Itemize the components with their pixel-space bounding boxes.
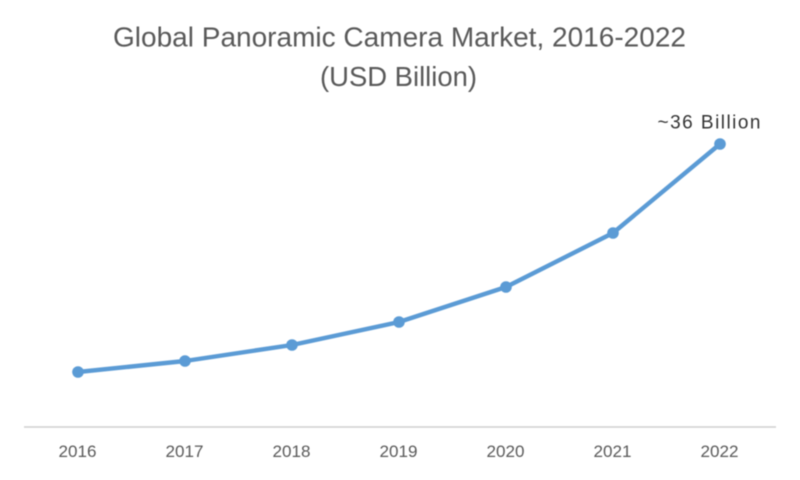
x axis labels: 2021 (594, 443, 632, 461)
x axis labels: 2016 (58, 443, 96, 461)
x axis labels: 2017 (166, 443, 204, 461)
x axis labels: 2019 (380, 443, 418, 461)
title (113, 22, 686, 92)
data label: ~36 Billion (658, 112, 760, 134)
x axis labels: 2018 (272, 443, 310, 461)
title: Global Panoramic Camera Market, 2016-2022 (113, 22, 686, 52)
x axis labels (58, 443, 738, 461)
line chart (72, 138, 726, 378)
x axis line (24, 426, 776, 428)
title: (USD Billion) (320, 61, 477, 92)
x axis labels: 2020 (486, 443, 524, 461)
x axis labels: 2022 (700, 443, 738, 461)
